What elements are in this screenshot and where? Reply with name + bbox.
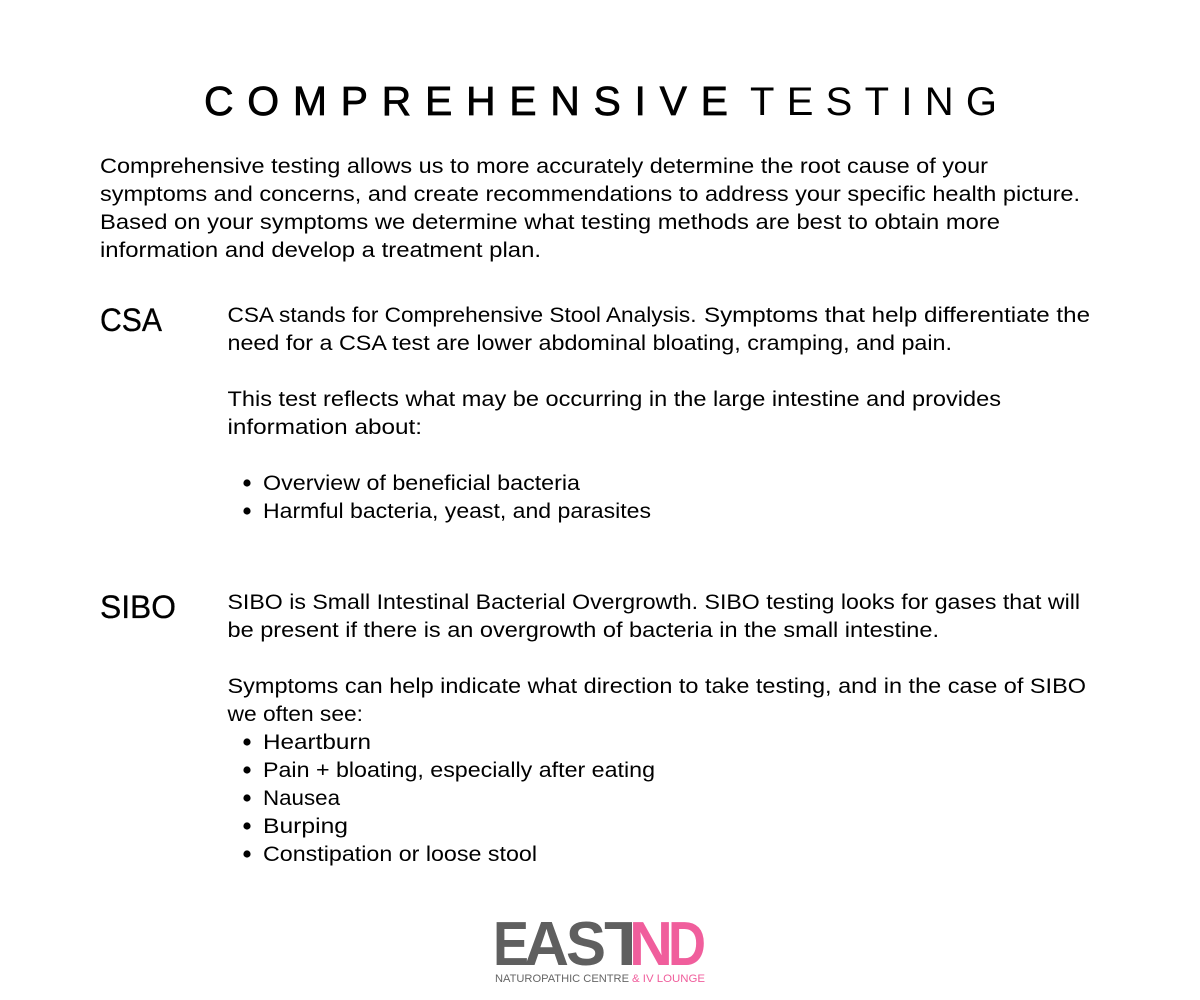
SIBO description: we often see: — [226, 703, 363, 726]
SIBO description: SIBO is Small Intestinal Bacterial Overgrowth. SIBO testing looks for gases that will — [228, 591, 1080, 614]
logo: EAST ND: A — [524, 910, 569, 979]
section: SIBO — [100, 589, 1086, 866]
SIBO bullet list: Burping — [263, 815, 348, 838]
intro text: symptoms and concerns, and create recommendations to address your specific health picture. — [100, 183, 1080, 206]
CSA bullet list: Harmful bacteria, yeast, and parasites — [263, 500, 651, 523]
title — [204, 78, 997, 124]
SIBO description: be present if there is an overgrowth of bacteria in the small intestine. — [228, 619, 939, 642]
CSA description: This test reflects what may be occurring in the large intestine and provides — [228, 388, 1001, 411]
title: TESTING — [750, 80, 997, 124]
CSA bullet list: Overview of beneficial bacteria — [263, 472, 580, 495]
logo: EAST ND: & IV LOUNGE — [632, 973, 705, 985]
logo: EAST ND: D — [668, 910, 706, 979]
section: CSA — [100, 302, 1090, 523]
intro text — [100, 155, 1080, 262]
CSA description: Symptoms that help differentiate the — [704, 304, 1090, 327]
heading: SIBO: SIBO — [100, 589, 176, 625]
logo: EAST ND: S — [566, 910, 606, 979]
SIBO bullet list: Pain + bloating, especially after eating — [263, 759, 655, 782]
SIBO bullet list — [243, 731, 655, 866]
logo: EAST ND: E — [493, 910, 529, 979]
CSA description: information about: — [228, 416, 422, 439]
CSA description: need for a CSA test are lower abdominal bloating, cramping, and pain. — [228, 332, 952, 355]
logo: EAST ND — [496, 922, 704, 982]
logo: EAST ND: N — [629, 910, 673, 979]
intro text: Comprehensive testing allows us to more accurately determine the root cause of your — [100, 155, 988, 178]
CSA description: CSA stands for Comprehensive Stool Analysis. — [228, 304, 696, 327]
SIBO bullet list: Nausea — [263, 787, 340, 810]
SIBO bullet list: Heartburn — [263, 731, 371, 754]
intro text: information and develop a treatment plan. — [100, 239, 541, 262]
SIBO description: Symptoms can help indicate what direction to take testing, and in the case of SIBO — [228, 675, 1086, 698]
SIBO description — [226, 591, 1086, 726]
CSA bullet list — [243, 472, 651, 523]
SIBO bullet list: Constipation or loose stool — [263, 843, 537, 866]
logo: EAST ND: T — [604, 910, 650, 979]
heading: CSA: CSA — [100, 302, 163, 338]
intro text: Based on your symptoms we determine what testing methods are best to obtain more — [100, 211, 1000, 234]
title: COMPREHENSIVE — [204, 78, 728, 124]
CSA description — [228, 304, 1090, 439]
logo: EAST ND: NATUROPATHIC CENTRE — [495, 973, 629, 985]
